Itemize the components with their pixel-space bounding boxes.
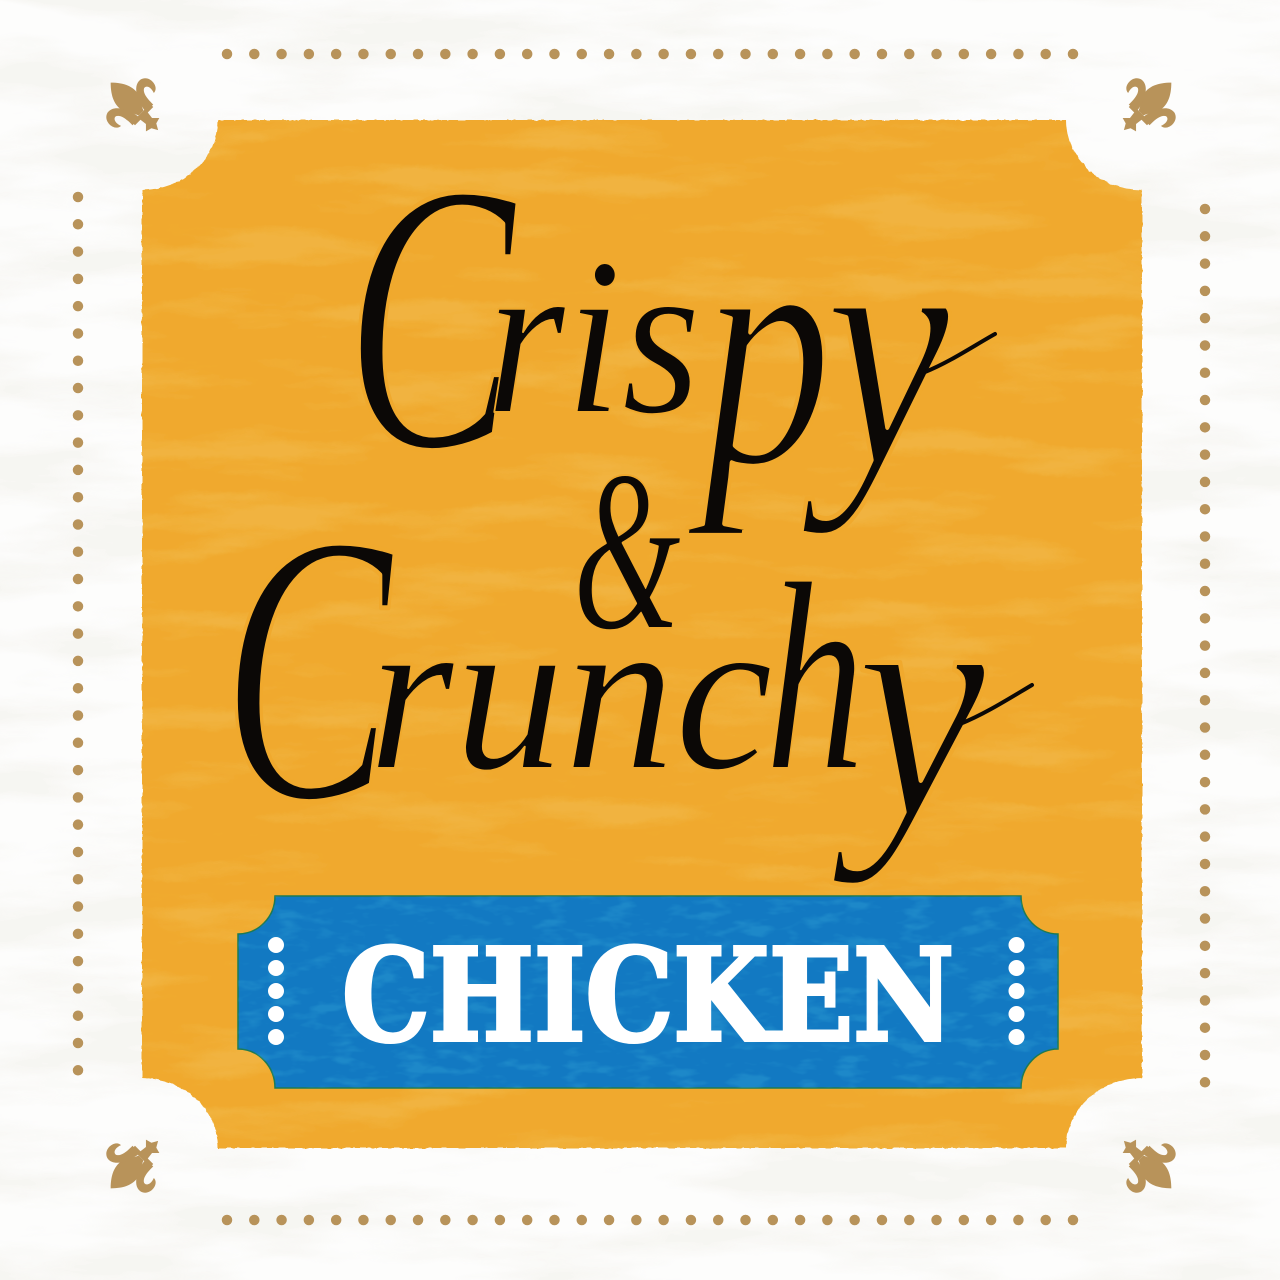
title: Crispy: ris <box>486 211 701 461</box>
banner text: CHICKEN: CHICKEN <box>342 921 954 1070</box>
title: Crispy: C <box>345 105 520 531</box>
title: Crunchy <box>222 456 1032 886</box>
banner dots: right <box>1008 937 1024 1045</box>
icon: fleur-de-lis bottom right <box>1102 1119 1193 1210</box>
title: Crunchy: y <box>829 521 989 886</box>
title: Crispy: p <box>686 160 832 537</box>
title: Crunchy: C <box>222 456 397 882</box>
title: Crispy: y <box>799 159 953 536</box>
banner: blue chicken ticket <box>238 896 1058 1088</box>
icon: fleur-de-lis top right <box>1102 61 1193 152</box>
icon: fleur-de-lis top left <box>89 61 180 152</box>
panel: orange ticket <box>142 120 1142 1148</box>
banner dots: left <box>268 937 284 1045</box>
title: Crispy <box>345 105 995 537</box>
flourish on y <box>960 685 1032 724</box>
title: Crunchy: runc <box>368 567 773 817</box>
title: ampersand: & <box>573 423 681 678</box>
icon: fleur-de-lis bottom left <box>89 1119 180 1210</box>
flourish on y <box>925 334 995 372</box>
title: Crunchy: h <box>765 528 865 827</box>
